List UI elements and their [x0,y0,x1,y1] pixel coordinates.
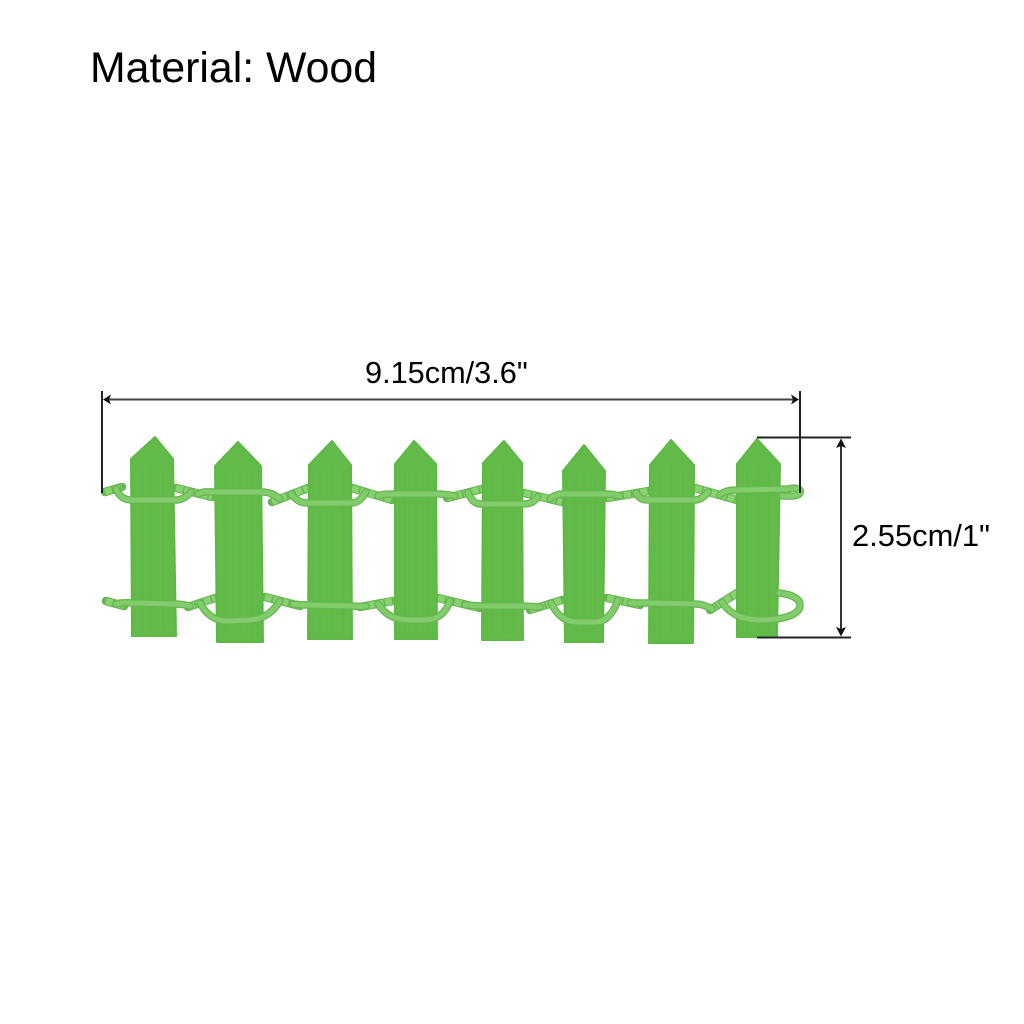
width dimension [102,355,800,493]
title: Material: Wood [90,44,377,92]
picket 1 [131,437,176,636]
picket 5 [482,441,523,640]
height dimension [757,438,990,638]
width dimension: 9.15cm/3.6" [365,355,528,390]
picket 8 [737,439,780,637]
picket 2 [215,442,263,642]
picket 7 [649,440,694,643]
front wire bands [116,488,800,622]
picket 6 [563,445,605,642]
fence product illustration [105,437,800,643]
picket 3 [308,441,352,639]
picket 4 [395,441,437,639]
height dimension: 2.55cm/1" [852,518,990,553]
twisted wire between pickets [105,487,737,610]
